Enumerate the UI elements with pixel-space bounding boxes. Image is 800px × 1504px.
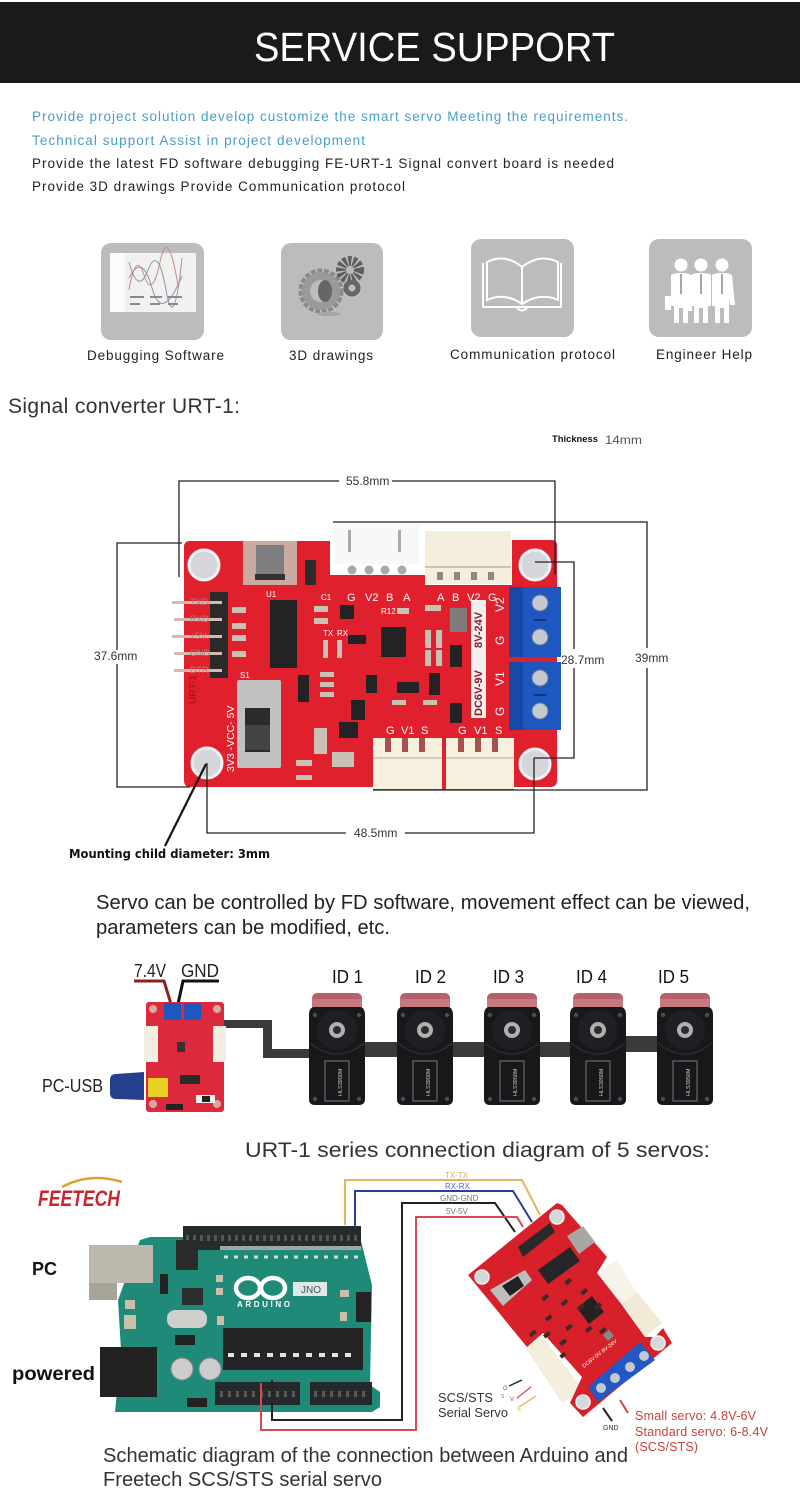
silk labels: S (421, 725, 428, 737)
oscillator crystal (167, 1310, 207, 1328)
paragraph: servo control (96, 892, 750, 939)
connection wires (261, 1180, 540, 1430)
wire labels (440, 1171, 478, 1216)
icon label: Debugging Software (87, 348, 224, 363)
servo ID 4 (570, 967, 626, 1105)
silk labels: G (386, 725, 395, 737)
power labels: GND (181, 961, 219, 981)
servo pin legend (501, 1380, 536, 1413)
lower connectors (525, 1337, 583, 1403)
service description text block: Technical support Assist in project development (32, 133, 365, 148)
heading: connection diagram: URT-1 series connection diagram of 5 servos: (245, 1139, 710, 1162)
servo pin legend: V (510, 1397, 514, 1403)
silk labels: C1 (321, 593, 332, 602)
silk labels: S (495, 725, 502, 737)
red voltage notes: Standard servo: 6-8.4V (635, 1425, 769, 1439)
PCB (468, 1203, 672, 1417)
silk labels: G (493, 636, 507, 645)
mounting holes (189, 550, 550, 779)
silk labels: S1 (240, 671, 250, 680)
reset button (356, 1292, 371, 1322)
small parts (124, 1275, 349, 1329)
PCB (184, 540, 557, 790)
servo ID 5: HLS3950M (686, 1068, 692, 1096)
thickness note: 14mm (605, 435, 642, 447)
Arduino logo (236, 1278, 327, 1309)
bottom connectors (373, 738, 514, 789)
red signal converter board photo (172, 524, 561, 790)
silk labels: URT-1 (188, 675, 199, 704)
wire labels: RX-RX (445, 1182, 471, 1191)
label: PC: PC (32, 1259, 57, 1279)
serial servo label: SCS/STS (438, 1391, 493, 1405)
voltage label strip: 8V-24V (473, 611, 485, 648)
silk labels (188, 590, 507, 772)
slide switch (237, 680, 281, 768)
power labels (134, 961, 219, 981)
silk labels: G (493, 707, 507, 716)
small chip (182, 1288, 203, 1305)
dimension: overall 39mm (333, 522, 674, 790)
USB connector (567, 1226, 595, 1254)
mini board (144, 1002, 226, 1112)
silk labels: RX (337, 629, 349, 638)
servo pin legend: S (517, 1407, 521, 1413)
PC-USB label: PC-USB (42, 1076, 103, 1096)
callout: mounting hole diameter: Mounting child diameter: 3mm (69, 846, 270, 861)
red voltage notes: (SCS/STS) (635, 1440, 698, 1454)
servo pin legend: G (503, 1386, 508, 1392)
strip text: DC6V-9V 8V-24V (582, 1338, 619, 1370)
servo ID 2 (397, 967, 453, 1105)
power wires (134, 981, 219, 1004)
board power leads (603, 1400, 628, 1432)
blue terminals (588, 1342, 655, 1402)
title: SERVICE SUPPORT (254, 24, 615, 70)
silk labels: V1 (401, 725, 414, 737)
silk labels: 3V3 -VCC- 5V (225, 705, 237, 772)
dimension: hole spacing 48.5mm (207, 758, 534, 840)
servo ID 1 (309, 967, 365, 1105)
header banner (0, 2, 800, 83)
service description text block: Provide the latest FD software debugging FE-URT-1 Signal convert board is needed (32, 156, 614, 171)
integrated circuits (270, 600, 462, 738)
wire labels: TX-TX (445, 1171, 469, 1180)
servo ID 3: HLS3950M (513, 1068, 519, 1096)
silk labels: V1 (493, 671, 507, 686)
silk labels: A (437, 592, 445, 604)
thickness note: Thickness (552, 434, 598, 445)
heading: signal converter: Signal converter URT-1: (8, 395, 240, 418)
silk labels: DTR (190, 665, 209, 675)
servo ID 1: HLS3950M (338, 1068, 344, 1096)
pin labels strip (224, 1256, 358, 1258)
paragraph: servo control: parameters can be modified, etc. (96, 917, 390, 939)
programming pins (176, 1240, 198, 1270)
service description text block: Provide 3D drawings Provide Communication protocol (32, 179, 405, 194)
icon: 3D drawings gears (281, 243, 383, 363)
pin header (518, 1223, 555, 1257)
label: powered: powered (12, 1364, 95, 1385)
servo ID 3: ID 3 (493, 967, 524, 987)
wire labels: 5V-5V (446, 1207, 468, 1216)
dimension: height 37.6mm: 37.6mm (94, 649, 137, 663)
dimension: height 37.6mm (94, 543, 190, 787)
power jack (100, 1347, 157, 1397)
dimension: hole spacing 28.7mm (534, 562, 604, 758)
capacitors (171, 1358, 221, 1380)
small components (232, 605, 442, 780)
GND label: GND (603, 1425, 619, 1432)
logo: Feetech: FEETECH (38, 1186, 121, 1211)
silk labels: V2 (493, 597, 507, 612)
red voltage notes (635, 1409, 769, 1454)
dimension: width 55.8mm (179, 474, 555, 577)
white connector top left (334, 524, 419, 574)
paragraph: servo control: Servo can be controlled by FD software, movement effect can be viewed, (96, 892, 750, 914)
servo ID 4: ID 4 (576, 967, 607, 987)
top pin header (183, 1226, 361, 1250)
icon label: Communication protocol (450, 347, 615, 362)
bottom headers (215, 1382, 300, 1405)
voltage label strip (471, 600, 486, 718)
silk labels: R12 (381, 607, 396, 616)
scattered parts (516, 1271, 616, 1370)
icon: engineer help people (649, 239, 752, 362)
silk labels: A (403, 592, 411, 604)
power labels: 7.4V (134, 961, 166, 981)
silk labels: B (452, 592, 459, 604)
servo ID 1: ID 1 (332, 967, 363, 987)
silk labels: V2 (467, 592, 480, 604)
silk labels: U1 (266, 590, 277, 599)
Arduino logo: ARDUINO (237, 1300, 290, 1309)
logo: Feetech (38, 1178, 122, 1211)
dimension: overall 39mm: 39mm (635, 651, 668, 665)
servo ID 3 (484, 967, 540, 1105)
voltage label strip: DC6V-9V (473, 669, 485, 716)
USB port (89, 1245, 153, 1283)
main chip (223, 1328, 363, 1370)
servo ID 4: HLS3950M (599, 1068, 605, 1096)
diode D1 (305, 560, 316, 585)
icon: communication protocol book (450, 239, 615, 362)
silk labels: +5V (190, 631, 206, 641)
series connection diagram (42, 961, 713, 1112)
micro USB (243, 541, 297, 585)
silk labels: B (386, 592, 393, 604)
silk labels: G (488, 592, 497, 604)
caption: schematic: Freetech SCS/STS serial servo (103, 1468, 382, 1491)
service description text block: Provide project solution develop customize the smart servo Meeting the requirements. (32, 109, 628, 124)
dimension: hole spacing 28.7mm: 28.7mm (561, 653, 604, 667)
caption: schematic: Schematic diagram of the connection between Arduino and (103, 1444, 628, 1467)
serial servo label: Serial Servo (438, 1406, 508, 1420)
silk labels: V1 (474, 725, 487, 737)
wire labels: GND-GND (440, 1194, 478, 1203)
servo pin legend: S (501, 1394, 505, 1400)
blue terminals (509, 587, 561, 730)
Arduino board photo (89, 1226, 380, 1412)
serial servo label (438, 1391, 508, 1420)
silk labels: TXD (190, 597, 209, 607)
silk labels: GND (190, 648, 210, 658)
right connectors (597, 1260, 637, 1305)
chip (538, 1247, 580, 1284)
usb plug (110, 1072, 144, 1100)
pin header (172, 592, 228, 678)
icon label: Engineer Help (656, 347, 752, 362)
servo ID 5: ID 5 (658, 967, 689, 987)
callout: mounting hole diameter (69, 764, 270, 861)
silk labels: G (458, 725, 467, 737)
servo ID 5 (657, 967, 713, 1105)
silk labels: TX (323, 629, 334, 638)
icon label: 3D drawings (289, 348, 373, 363)
icon: debugging software (87, 243, 224, 363)
slide switch (490, 1270, 532, 1306)
caption: schematic (103, 1444, 628, 1491)
PCB (115, 1237, 380, 1412)
white connector top right (425, 531, 511, 584)
Arduino logo: JNO (301, 1285, 321, 1296)
dimension: hole spacing 48.5mm: 48.5mm (354, 826, 397, 840)
servo ID 2: ID 2 (415, 967, 446, 987)
thickness note (552, 434, 642, 447)
servo ID 2: HLS3950M (426, 1068, 432, 1096)
daisy chain cables (224, 1020, 660, 1058)
silk labels: G (347, 592, 356, 604)
rotated red board (468, 1203, 672, 1417)
dimension: width 55.8mm: 55.8mm (346, 474, 389, 488)
service description text block (32, 109, 628, 194)
mounting holes (475, 1210, 665, 1409)
red voltage notes: Small servo: 4.8V-6V (635, 1409, 757, 1423)
silk labels: RXD (190, 614, 210, 624)
silk labels: V2 (365, 592, 378, 604)
